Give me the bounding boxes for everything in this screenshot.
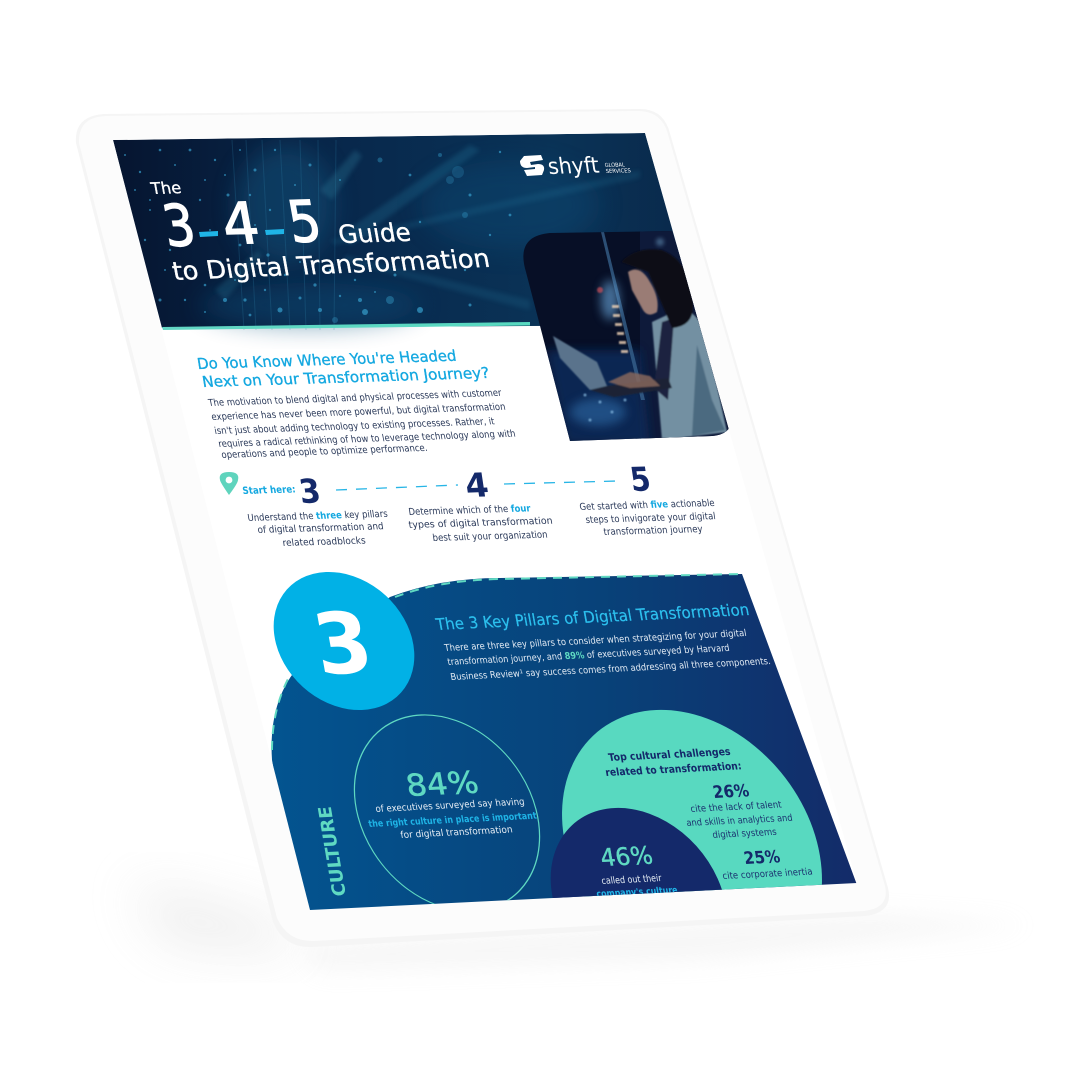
step 3 text (247, 509, 388, 549)
section paragraph (443, 628, 772, 683)
challenges heading line 2: related to transformation: (604, 760, 743, 779)
numeral 5: 5 (283, 188, 326, 256)
title: The 3-4-5 Guide to Digital Transformation (148, 178, 492, 286)
icon: location pin (220, 472, 238, 495)
hands (608, 372, 660, 388)
numeral 3: 3 (296, 472, 323, 511)
challenges heading line 1: Top cultural challenges (607, 746, 732, 764)
line 2: of digital transformation and (257, 521, 384, 536)
callout: 84 percent circle (333, 711, 561, 915)
line 3: related roadblocks (282, 536, 366, 549)
callout: 46 percent (530, 805, 748, 995)
paragraph line 3: isn't just about adding technology to existing processes. Rather, it (213, 416, 496, 437)
laptop (553, 336, 607, 390)
line 3: Business Review¹ say success comes from addressing all three components. (450, 656, 772, 683)
25 percent: 25% (742, 847, 782, 869)
line 3: best suit your organization (432, 530, 548, 544)
numeral 4: 4 (217, 190, 264, 258)
panel: 3 key pillars (258, 569, 870, 995)
dashed line (336, 481, 618, 490)
stat line 1: of executives surveyed say having (375, 797, 526, 815)
stat line 1: called out their (601, 873, 663, 887)
heading line 1: Do You Know Where You're Headed (196, 347, 458, 373)
stat line 2: the right culture in place is important (368, 811, 538, 830)
stat line 2: company's culture (596, 885, 679, 900)
numeral 5: 5 (627, 460, 653, 499)
dash (265, 229, 284, 235)
25 line: cite corporate inertia (722, 867, 814, 882)
line 1: Determine which of the four (408, 503, 532, 518)
numeral 4: 4 (462, 465, 491, 505)
global services: GLOBAL (604, 162, 626, 169)
line 1: Understand the three key pillars (247, 509, 388, 524)
heading line 2: Next on Your Transformation Journey? (201, 364, 491, 391)
line 1: There are three key pillars to consider when strategizing for your digital (443, 628, 748, 654)
number badge (258, 569, 430, 713)
photo: woman with laptop at night (523, 231, 729, 441)
step 4 text (408, 503, 553, 544)
stat line 3: for digital transformation (400, 824, 514, 841)
teal header rule (162, 322, 530, 330)
dash (199, 231, 218, 237)
The: The (148, 178, 183, 198)
26 line 3: digital systems (712, 827, 778, 841)
hair (621, 249, 693, 328)
line 2: types of digital transformation (408, 516, 553, 531)
stat value: 84% (403, 766, 481, 804)
paragraph line 4: requires a radical rethinking of how to leverage technology along with (217, 429, 517, 450)
26 percent: 26% (711, 781, 751, 803)
dashed teal border (272, 574, 742, 750)
stat value: 46% (598, 842, 655, 872)
roadmap numerals and dashed path (300, 466, 649, 504)
line 2: steps to invigorate your digital (585, 511, 716, 526)
start here label: Start here: (242, 484, 296, 497)
global services second line: SERVICES (605, 168, 632, 175)
blazer (652, 308, 727, 440)
to Digital Transformation: to Digital Transformation (170, 244, 492, 286)
paragraph line 5: operations and people to optimize performance. (220, 443, 429, 461)
logo mark (520, 155, 544, 176)
tablet drop shadow (130, 885, 1030, 970)
shyft wordmark: shyft (546, 153, 601, 180)
callout: top cultural challenges (531, 705, 853, 989)
screen page background (100, 120, 880, 920)
step 5 text (579, 498, 716, 538)
paragraph line 2: experience has never been more powerful, but digital transformation (210, 402, 507, 423)
tablet screen (113, 133, 856, 910)
intro paragraph (207, 388, 517, 461)
numeral 3: 3 (158, 193, 200, 260)
26 line 2: and skills in analytics and (686, 813, 794, 829)
tablet body (76, 109, 889, 947)
panel background (272, 574, 870, 930)
Guide: Guide (336, 218, 413, 249)
face (628, 270, 658, 315)
header banner (113, 133, 700, 330)
line 3: transformation journey (603, 524, 704, 538)
line 1: Get started with five actionable (579, 498, 715, 513)
culture label: CULTURE (315, 806, 351, 897)
badge numeral: 3 (306, 593, 380, 694)
intro heading (198, 349, 488, 388)
shyft logo (520, 155, 631, 178)
paragraph line 1: The motivation to blend digital and physical processes with customer (207, 388, 503, 409)
line 2: transformation journey, and 89% of executives surveyed by Harvard (447, 643, 731, 668)
26 line 1: cite the lack of talent (690, 800, 783, 815)
section heading: The 3 Key Pillars of Digital Transformation (433, 600, 751, 634)
